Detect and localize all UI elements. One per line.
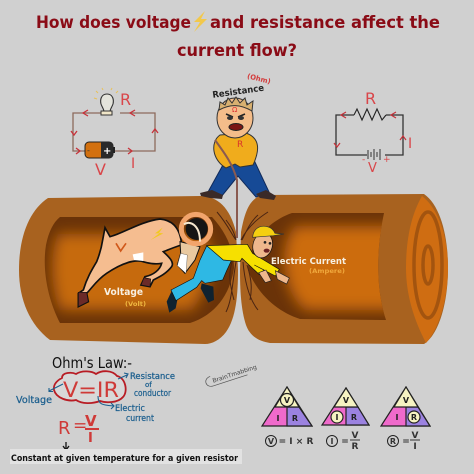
rope xyxy=(215,140,237,238)
head xyxy=(177,242,200,273)
labels: R xyxy=(365,89,376,108)
goat (voltage) xyxy=(78,214,211,307)
down arrow xyxy=(63,442,69,450)
shirt and arms xyxy=(207,244,279,276)
left pipe body xyxy=(19,196,238,344)
triangle: solve for V: I xyxy=(277,414,280,423)
resistance label: Resistance xyxy=(212,84,265,101)
triangle equations: = xyxy=(402,437,410,447)
lightning mark xyxy=(151,228,163,240)
triangle equations: I xyxy=(413,442,417,452)
circuit labels xyxy=(95,90,135,179)
horn xyxy=(181,214,211,244)
legs xyxy=(208,160,269,197)
pipe labels xyxy=(104,257,347,308)
trousers xyxy=(171,246,232,301)
formula cloud: V=IR xyxy=(63,378,119,402)
shirt xyxy=(214,133,258,168)
constant note xyxy=(10,449,242,464)
triangle equations: I xyxy=(331,437,334,446)
pipe labels: (Volt) xyxy=(125,300,146,308)
title xyxy=(36,13,440,60)
blue annotations xyxy=(16,372,175,424)
helmet xyxy=(253,226,284,237)
R equals V over I: V xyxy=(85,412,97,430)
face xyxy=(226,114,245,117)
head xyxy=(250,231,275,260)
end cap rings xyxy=(414,212,442,318)
icon: title lightning bolt xyxy=(194,11,207,32)
R equals V over I: I xyxy=(88,431,93,446)
resistance character xyxy=(200,69,276,238)
pipe labels: Voltage xyxy=(104,287,143,298)
hooves xyxy=(78,278,151,307)
triangle: solve for V: V xyxy=(284,396,291,405)
right resistor circuit xyxy=(334,89,412,176)
pipe end cap xyxy=(406,196,448,343)
signature xyxy=(204,362,258,388)
triangle equations: R xyxy=(390,437,396,446)
icon: battery: - xyxy=(87,146,90,155)
circuit labels: V xyxy=(95,160,106,179)
title: current flow? xyxy=(177,41,297,60)
icon: light bulb xyxy=(94,88,118,115)
chest patch xyxy=(133,252,143,261)
title: and resistance affect the xyxy=(210,13,440,32)
left pipe interior xyxy=(44,217,234,323)
labels: + xyxy=(383,155,391,165)
R equals V over I: R xyxy=(58,418,71,439)
resistor xyxy=(354,109,386,120)
right pipe interior xyxy=(248,213,386,320)
signature: Brain xyxy=(212,373,229,385)
labels: V xyxy=(368,161,377,176)
right pipe body xyxy=(240,194,448,344)
triangle: solve for V: R xyxy=(292,414,298,423)
resistance label: (Ohm) xyxy=(246,72,272,86)
triangle: solve for I: V xyxy=(343,396,350,405)
triangle equations: V xyxy=(412,431,419,441)
labels: I xyxy=(408,136,412,152)
icon: battery xyxy=(85,142,115,158)
resistance character: R xyxy=(237,140,243,150)
triangle equations: R xyxy=(352,442,359,452)
boots xyxy=(167,283,214,313)
blue annotations: of xyxy=(145,381,152,389)
R equals V over I xyxy=(58,412,99,446)
hair xyxy=(219,97,253,111)
triangle equations xyxy=(266,431,420,452)
blue annotations: Voltage xyxy=(16,395,52,406)
shoes xyxy=(200,190,276,200)
triangle equations: V xyxy=(352,431,359,441)
circuit arrows xyxy=(71,110,158,154)
resistance character: Ω xyxy=(232,106,238,114)
triangle: solve for R: V xyxy=(403,396,410,405)
triangle equations: = I × R xyxy=(279,437,313,447)
triangle: solve for I: R xyxy=(351,413,357,422)
circuit labels: R xyxy=(120,90,131,109)
worker (electric current) xyxy=(167,226,289,313)
split pipe xyxy=(19,194,448,344)
triangle: solve for I: I xyxy=(336,413,339,422)
blue annotations: Electric xyxy=(115,404,145,414)
battery symbol xyxy=(368,149,380,160)
triangle: solve for I xyxy=(322,388,369,425)
resistance label xyxy=(210,69,274,101)
Ohm's law heading: Ohm's Law:- xyxy=(52,354,132,372)
triangle equations: = xyxy=(341,437,349,447)
blue annotations: current xyxy=(126,414,154,424)
triangle: solve for R: R xyxy=(411,413,417,422)
goat body xyxy=(78,219,182,307)
triangle equations: V xyxy=(268,437,275,446)
crack lines xyxy=(217,212,268,312)
head xyxy=(217,98,253,138)
signature: Tmabbing xyxy=(226,364,258,380)
pipe labels: Electric Current xyxy=(271,257,347,267)
constant note: Constant at given temperature for a given resistor xyxy=(11,454,238,464)
triangle: solve for V xyxy=(262,387,312,426)
V mark xyxy=(116,243,126,251)
pipe labels: (Ampere) xyxy=(309,267,345,275)
icon: battery: + xyxy=(103,146,111,157)
R equals V over I: = xyxy=(73,416,87,436)
title: How does voltage xyxy=(36,13,191,32)
blue annotations: conductor xyxy=(134,389,171,399)
labels xyxy=(362,89,412,176)
face xyxy=(264,241,266,244)
triangle: solve for R: I xyxy=(396,413,399,422)
formula cloud xyxy=(54,371,126,403)
beard xyxy=(177,253,187,273)
left bulb circuit xyxy=(71,88,158,179)
circuit labels: I xyxy=(131,156,135,172)
hands xyxy=(259,270,289,284)
blue annotations: Resistance xyxy=(130,372,175,382)
triangle: solve for R xyxy=(381,387,430,426)
labels: - xyxy=(362,155,365,165)
